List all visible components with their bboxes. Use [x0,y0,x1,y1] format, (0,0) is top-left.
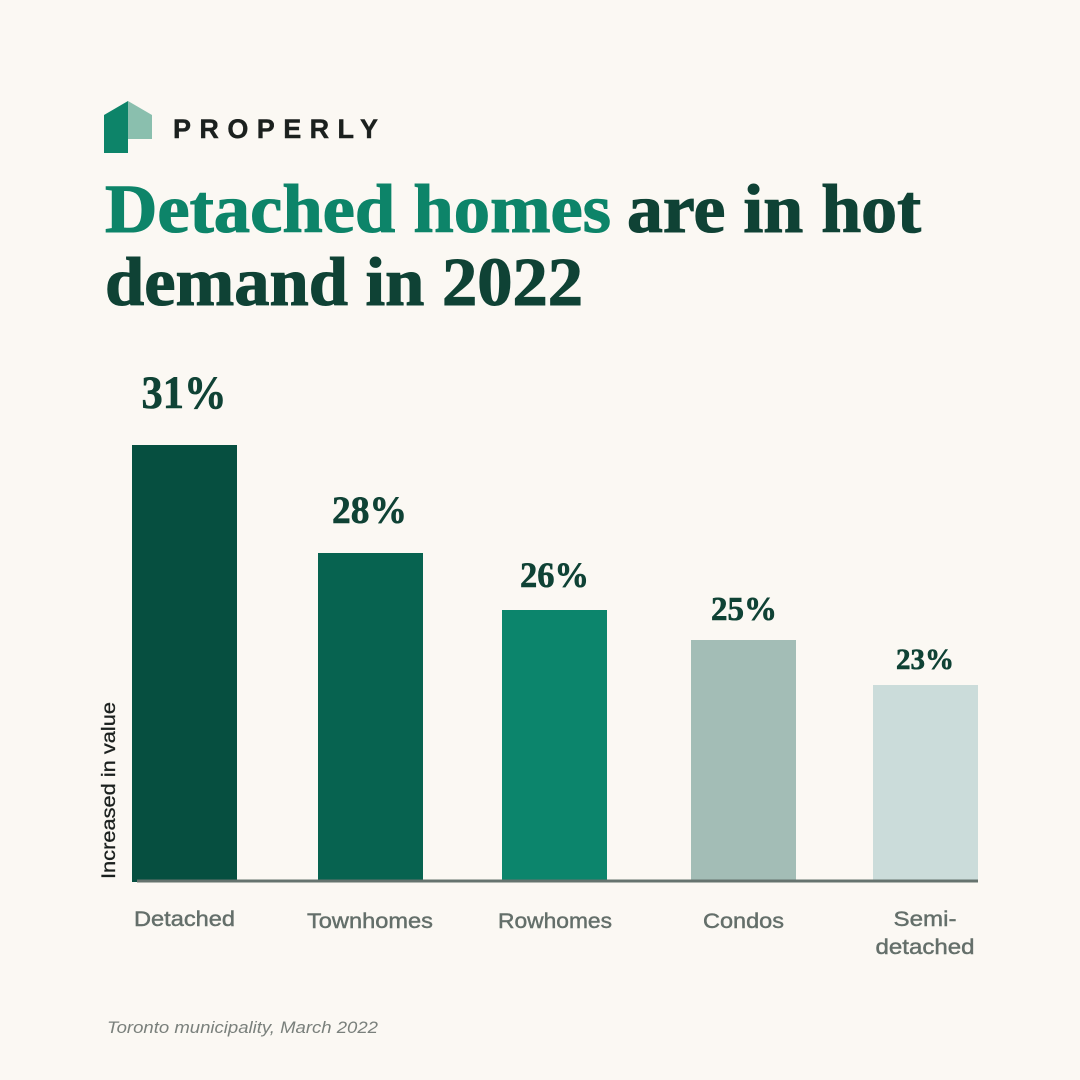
bar: Townhomes 28% [318,489,423,882]
bar: Townhomes 28%: 28% [332,489,407,532]
category labels: Townhomes [307,909,433,933]
bar: Condos 25% [691,591,796,882]
bar: Detached 31%: 31% [142,367,226,419]
bar: Semi-detached 23% [873,643,978,882]
bar: Detached 31% [132,367,237,882]
bar: Rowhomes 26%: 26% [520,555,589,595]
bar: Condos 25%: 25% [711,591,777,628]
category labels: Condos [703,909,784,933]
category labels [134,907,974,959]
title: demand in 2022 [105,244,583,320]
axis line [137,880,978,882]
y-axis label: Increased in value [98,702,120,879]
category labels: Semi- [894,907,956,931]
title: are in hot [627,171,921,247]
category labels: Detached [134,907,235,931]
brand name: PROPERLY [173,114,378,144]
title: Detached homes [105,171,611,247]
bar: Rowhomes 26% [502,555,607,882]
bar: Semi-detached 23%: 23% [896,643,954,676]
bar chart [98,367,978,959]
icon: house mark [104,101,152,153]
category labels: Rowhomes [498,909,612,933]
source note: Toronto municipality, March 2022 [107,1018,379,1037]
category labels: detached [876,935,974,959]
logo: Properly [104,101,378,153]
title [105,171,921,320]
